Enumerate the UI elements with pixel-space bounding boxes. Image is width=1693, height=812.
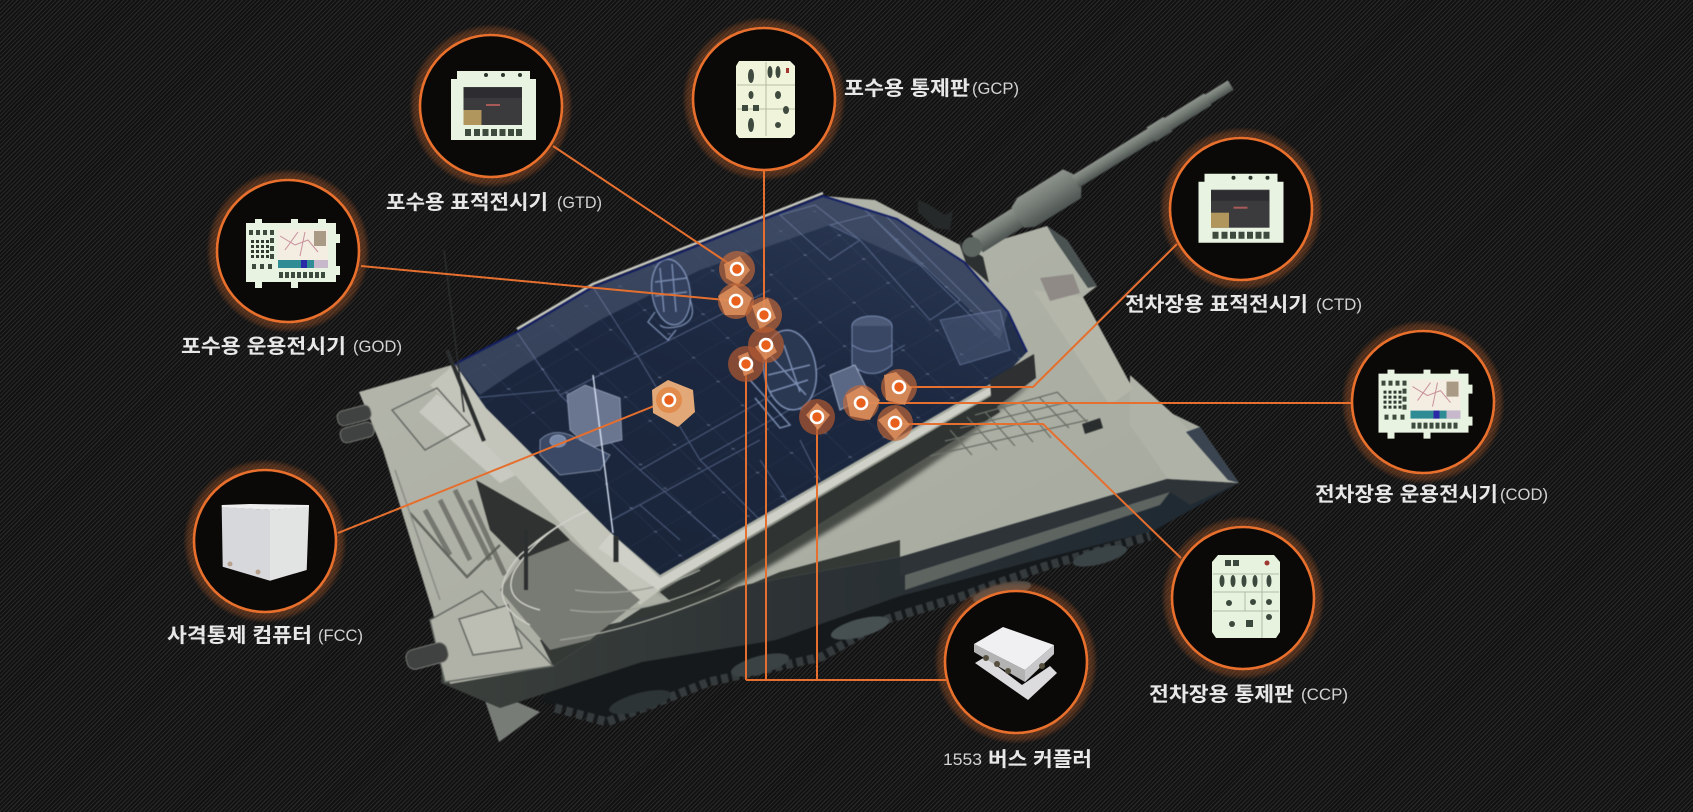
label: CTD (1125, 293, 1362, 316)
label: CTD: 전차장용 표적전시기 (1125, 293, 1308, 316)
panel: FCC callout (167, 459, 363, 647)
label: FCC: (FCC) (318, 626, 363, 645)
label: GTD: 포수용 표적전시기 (386, 191, 548, 214)
label: COD: (COD) (1500, 485, 1548, 504)
label: bus coupler: 버스 커플러 (988, 748, 1092, 771)
cylinder unit (830, 316, 892, 410)
leader lines (338, 146, 1352, 680)
panel: bus coupler callout (934, 580, 1098, 771)
gun mantlet (918, 200, 989, 283)
label: FCC (167, 624, 363, 647)
label: GOD: (GOD) (353, 337, 402, 356)
icon: bus coupler (974, 627, 1057, 700)
icon: fire control computer (222, 504, 309, 581)
icon: commander operating display (1378, 370, 1472, 439)
hotspot: CTD (881, 369, 917, 405)
icon: gunner control panel (736, 61, 795, 138)
deck grid (930, 392, 1088, 456)
icon: gunner operating display (246, 219, 340, 288)
label: CCP (1149, 683, 1348, 706)
hull deck (359, 196, 1239, 684)
hotspots (652, 251, 917, 441)
upper wall (455, 196, 1008, 395)
lower hull shadow band (540, 540, 900, 666)
label: GCP: (GCP) (972, 79, 1019, 98)
turret side shadow (658, 385, 1030, 603)
panel: GOD callout (181, 169, 402, 358)
hotspot: CCP (877, 405, 913, 441)
storage box (540, 385, 622, 475)
front hull strip (900, 375, 1239, 590)
glass top edge (455, 196, 1027, 364)
hotspot: bus coupler 3 (799, 399, 835, 435)
rear deck plates (392, 388, 740, 682)
turret cheek details (1047, 226, 1097, 288)
label: FCC: 사격통제 컴퓨터 (167, 624, 312, 647)
antennas (444, 250, 616, 590)
label: GCP (844, 77, 1019, 100)
main gun (968, 71, 1240, 257)
hotspot: bus coupler 1 (748, 327, 784, 363)
hotspot: GOD (718, 283, 754, 319)
label: GOD (181, 335, 402, 358)
label: COD: 전차장용 운용전시기 (1315, 483, 1498, 506)
label: GCP: 포수용 통제판 (844, 77, 970, 100)
exhaust pipes (336, 404, 450, 671)
dark shadow beneath frame (660, 396, 1000, 610)
icon: commander target display (1198, 174, 1284, 243)
gunner sight hatch (750, 327, 821, 428)
rear deck recess (410, 364, 660, 650)
hull side (441, 440, 1239, 708)
dividers (450, 205, 1010, 540)
panel: CTD callout (1125, 127, 1362, 316)
turret glass panel (440, 190, 1040, 590)
hotspot: GCP (746, 297, 782, 333)
label: CCP: (CCP) (1301, 685, 1348, 704)
turret front frame (598, 354, 1036, 590)
side bracket (1082, 418, 1103, 434)
tank illustration (336, 71, 1240, 742)
panel: COD callout (1315, 320, 1548, 506)
label: CCP: 전차장용 통제판 (1149, 683, 1294, 706)
panel: GCP callout (682, 17, 1019, 181)
label: GOD: 포수용 운용전시기 (181, 335, 346, 358)
hotspot: bus coupler 2 (728, 346, 764, 382)
label: GTD: (GTD) (557, 193, 602, 212)
icon: rear fin (480, 686, 540, 742)
window hatch (648, 257, 694, 340)
label: GTD (386, 191, 602, 214)
hotspot: FCC (652, 380, 695, 427)
label: bus coupler (943, 748, 1092, 771)
label: bus coupler: 1553 (943, 750, 982, 769)
panel: GTD callout (386, 24, 602, 214)
hotspot: COD (843, 385, 880, 421)
light diagonal band (1033, 290, 1133, 405)
icon: gunner target display (451, 71, 536, 140)
label: CTD: (CTD) (1316, 295, 1362, 314)
hotspot: GTD (719, 251, 755, 287)
icon: commander control panel (1212, 555, 1280, 638)
panel: CCP callout (1149, 516, 1348, 706)
tank tracks (540, 510, 1180, 725)
